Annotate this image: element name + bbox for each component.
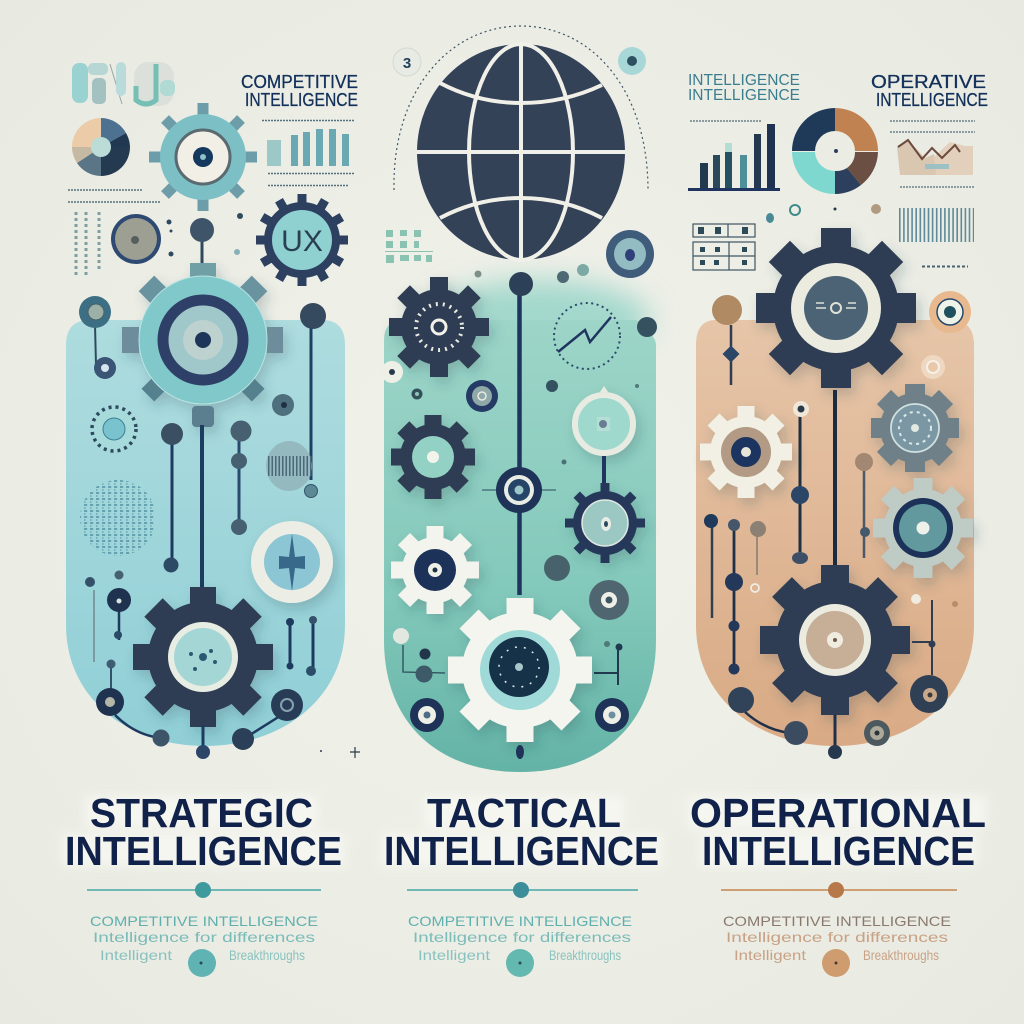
disc: top right (606, 230, 654, 278)
connector: three nodes (230, 420, 252, 535)
right pins (911, 594, 958, 675)
white gear: large (448, 598, 592, 742)
knob: white (381, 361, 403, 383)
bottom node (828, 715, 842, 759)
caption (922, 266, 968, 268)
title: operational: INTELLIGENCE (702, 828, 975, 874)
white gear: left (391, 526, 479, 614)
dark gear: top (389, 277, 489, 377)
large teal gear (122, 263, 283, 427)
line chart (554, 303, 620, 369)
caption: operational: Intelligent (734, 947, 806, 963)
dot (637, 317, 657, 337)
divider: tactical (407, 882, 638, 898)
competitive intelligence heading (241, 72, 358, 110)
dark gear: middle left (391, 415, 475, 499)
cream gear (700, 406, 792, 498)
dark gear: UX (256, 194, 348, 286)
arc badge right (618, 47, 646, 75)
eye bottom (864, 720, 890, 746)
title: tactical (384, 790, 659, 874)
divider: operational (721, 882, 957, 898)
gray node (544, 555, 570, 581)
pale gear (873, 478, 973, 578)
central line (833, 390, 837, 570)
heading: operative intelligence: OPERATIVE (871, 72, 986, 92)
bottom node (196, 725, 210, 759)
caption: strategic: Intelligence for differences (93, 929, 315, 945)
small eye (412, 388, 422, 400)
dots (546, 380, 639, 464)
target right (595, 698, 629, 732)
caption: strategic: Intelligent (100, 947, 172, 963)
title: tactical: INTELLIGENCE (384, 828, 659, 874)
small knob (272, 394, 294, 416)
strategic top gear (149, 103, 257, 211)
pie chart: strategic (72, 118, 130, 176)
caption: tactical: Intelligent (418, 947, 490, 963)
area chart (890, 121, 975, 187)
icons: top left logos (72, 62, 175, 106)
small dots (474, 264, 589, 283)
connector node (190, 218, 214, 265)
title: tactical: TACTICAL (427, 790, 621, 836)
long connector right (300, 303, 326, 498)
bar chart: operational (688, 121, 780, 191)
arc badge left: 3 (403, 55, 411, 72)
heading: operative intelligence (871, 72, 988, 110)
heading: operative intelligence: INTELLIGENCE (876, 90, 988, 110)
small rings (766, 204, 881, 223)
title: strategic: STRATEGIC (90, 790, 313, 836)
pale ring (921, 355, 945, 379)
donut chart (792, 108, 878, 194)
caption: strategic: Breakthroughs (229, 947, 305, 963)
heading: intelligence duplicate: INTELLIGENCE (688, 87, 800, 104)
caption: tactical: Breakthroughs (549, 947, 621, 963)
white ring gear (575, 386, 633, 453)
caption: operational: COMPETITIVE INTELLIGENCE (723, 913, 951, 929)
dark gear: UX: UX (281, 225, 323, 258)
hatched ellipse (266, 441, 312, 491)
caption: tactical (408, 913, 632, 977)
central line and node (509, 272, 533, 595)
big dark gear: bottom (760, 565, 910, 715)
heading: intelligence duplicate (688, 72, 800, 104)
caption: strategic: COMPETITIVE INTELLIGENCE (90, 913, 318, 929)
title: strategic: INTELLIGENCE (65, 828, 342, 874)
title: operational (690, 790, 986, 874)
big dark gear: top (756, 228, 916, 388)
caption: strategic (90, 913, 318, 977)
eye icon (929, 291, 971, 333)
swirl node (79, 296, 116, 379)
connector (602, 456, 606, 490)
curved connector left (96, 660, 170, 746)
caption: operational (723, 913, 951, 977)
globe (417, 44, 625, 260)
eye node (910, 675, 948, 713)
target node (482, 467, 556, 513)
central connector line (200, 425, 204, 588)
dark gear: right (565, 483, 645, 563)
title: strategic (65, 790, 342, 874)
brown node (712, 295, 742, 385)
dotted globe (80, 480, 156, 556)
gray disc (589, 580, 629, 620)
panel: strategic (66, 62, 358, 759)
left pins (704, 514, 766, 674)
small dots (166, 213, 243, 256)
caption lines: left (68, 190, 160, 278)
sparkle (320, 747, 360, 758)
caption: operational: Intelligence for differences (726, 929, 948, 945)
panel: tactical (381, 26, 657, 772)
target left (410, 698, 444, 732)
panel: operational (688, 72, 988, 759)
bottom drop (516, 745, 524, 759)
table icon (385, 230, 433, 263)
left connectors (393, 628, 445, 682)
caption: tactical: Intelligence for differences (413, 929, 631, 945)
heading: intelligence duplicate: INTELLIGENCE (688, 72, 800, 89)
pin: tan (855, 453, 873, 558)
large dark gear: strategic (133, 587, 273, 727)
competitive intelligence heading: COMPETITIVE (241, 72, 358, 92)
cream dial (251, 521, 333, 603)
divider: strategic (87, 882, 321, 898)
pin with cream knob (791, 401, 809, 564)
curved connector (728, 687, 808, 745)
title glow (62, 796, 986, 866)
node with stem (107, 570, 131, 640)
gray gear (871, 384, 959, 472)
connector: left pin (161, 423, 183, 572)
arc badge left (393, 48, 421, 76)
ring icon (466, 380, 498, 412)
caption: operational: Breakthroughs (863, 947, 939, 963)
pins right (286, 616, 317, 676)
table icon (693, 224, 755, 270)
title: operational: OPERATIONAL (690, 790, 986, 836)
bar chart: strategic (262, 120, 355, 186)
dotted ring (92, 407, 136, 451)
competitive intelligence heading: INTELLIGENCE (245, 90, 358, 110)
barcode (899, 208, 974, 242)
curved connector right (232, 689, 303, 750)
dotted arc (394, 26, 648, 190)
caption: tactical: COMPETITIVE INTELLIGENCE (408, 913, 632, 929)
right connectors (594, 641, 622, 685)
disc icon (111, 214, 161, 264)
pins left (85, 577, 95, 662)
